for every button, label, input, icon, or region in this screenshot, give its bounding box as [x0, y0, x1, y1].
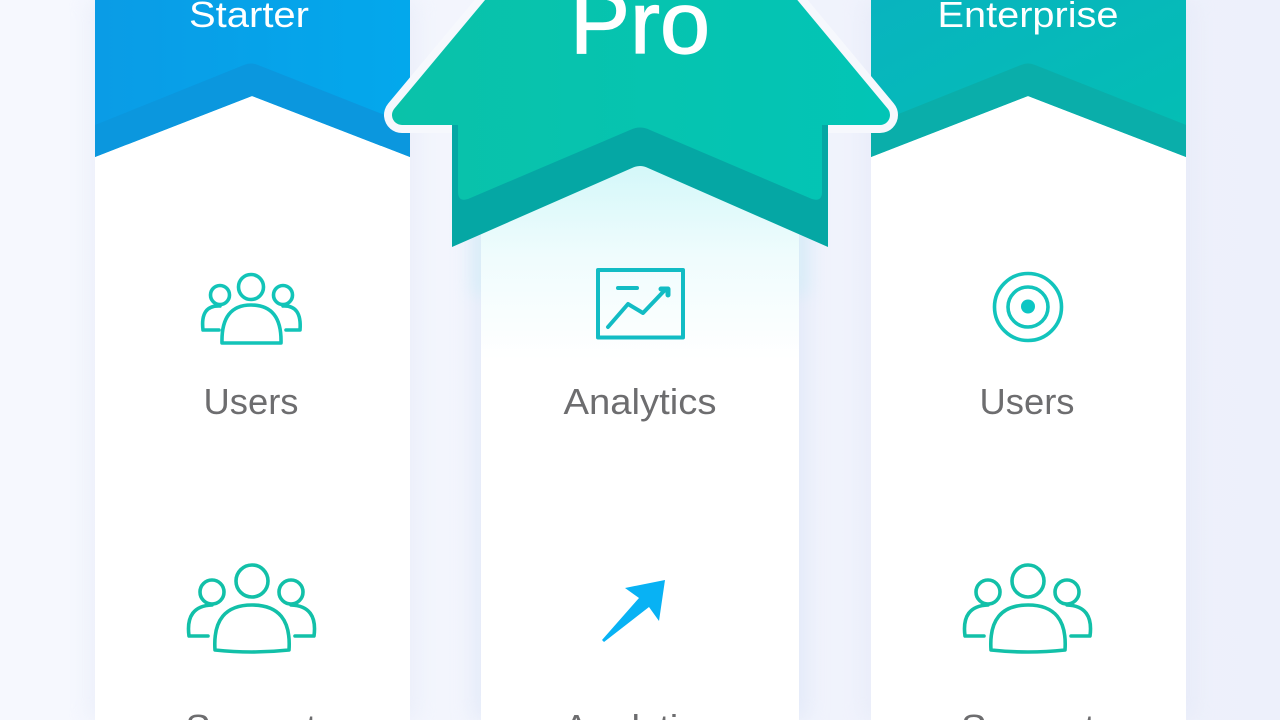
icon: up-right arrow — [602, 580, 665, 642]
icon: support team — [188, 565, 315, 652]
Pro arrow body — [458, 120, 822, 200]
icon: analytics chart — [598, 270, 683, 338]
label: Users: Users — [204, 381, 298, 422]
Pro arrow outline — [402, 0, 880, 115]
Enterprise header ribbon — [871, 0, 1186, 157]
icon: target — [994, 274, 1062, 340]
icon: users — [203, 274, 300, 343]
Enterprise ribbon fold — [871, 64, 1186, 157]
icon: support team — [964, 565, 1091, 652]
Enterprise card body — [871, 0, 1186, 720]
panel: Pro — [402, 0, 880, 720]
Pro card tint — [481, 150, 799, 360]
label: Users: Users — [980, 381, 1074, 422]
Pro card glow — [470, 210, 810, 295]
label: Analytics: Analytics — [564, 381, 716, 422]
Pro ribbon fold — [452, 125, 828, 247]
Pro card body — [481, 150, 799, 720]
panel: Starter — [88, 0, 418, 720]
panel: Enterprise — [862, 0, 1196, 720]
Starter ribbon fold — [95, 64, 410, 157]
Pro arrow head — [402, 0, 880, 115]
Starter card body — [95, 0, 410, 720]
Starter header ribbon — [95, 0, 410, 157]
